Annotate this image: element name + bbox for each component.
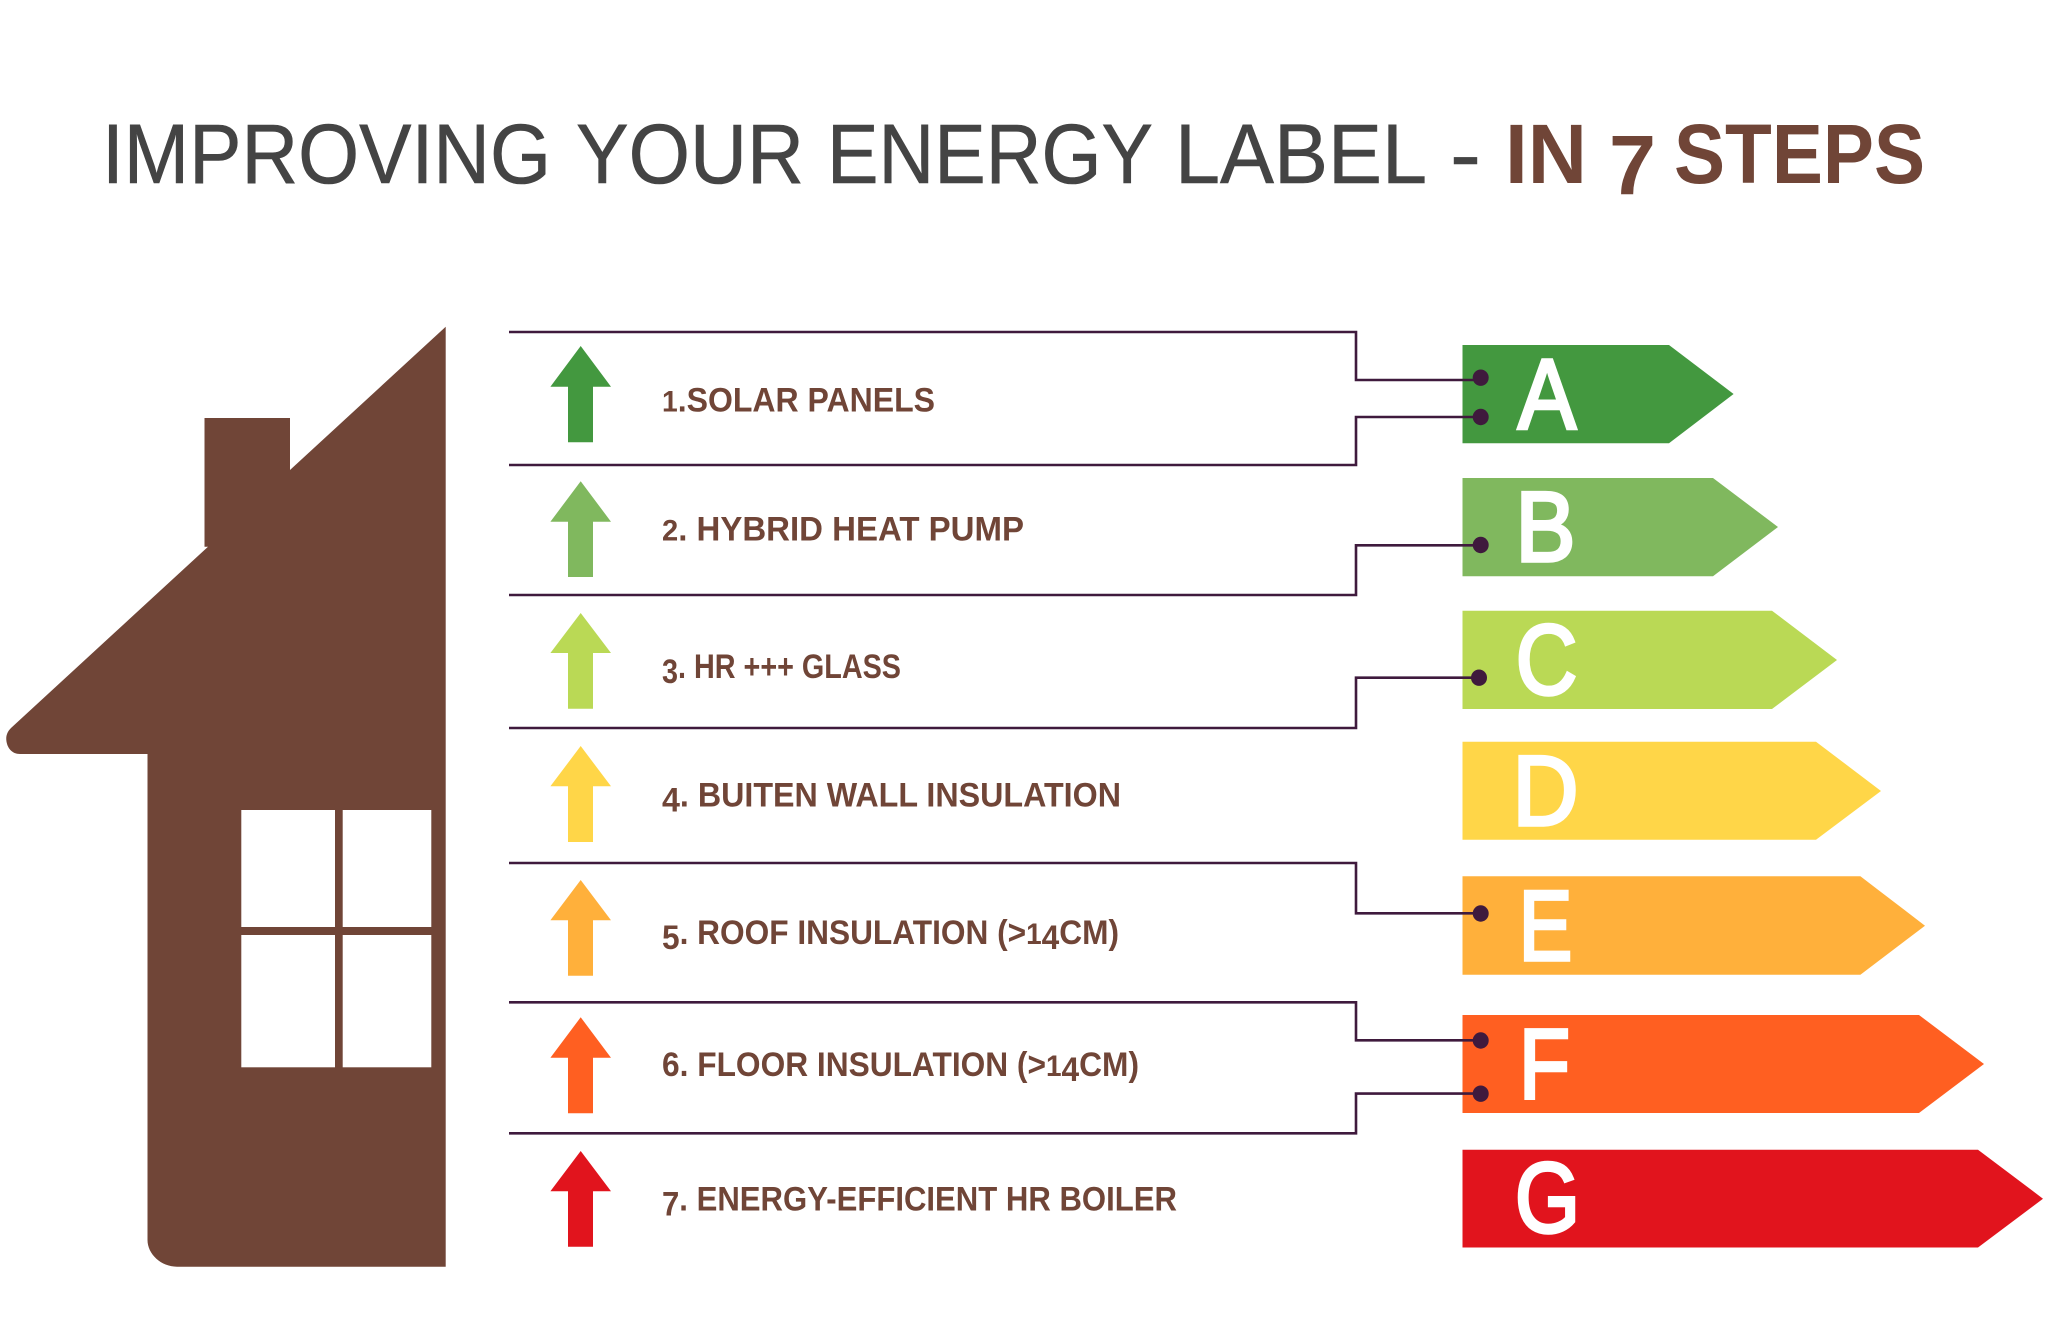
energy tag A: A bbox=[1518, 338, 1576, 450]
title: IN bbox=[1505, 107, 1587, 201]
step 5 label: 4 bbox=[1042, 919, 1059, 957]
connector: step 3 to tag B bbox=[509, 537, 1489, 595]
energy tag G bbox=[1462, 1142, 2043, 1253]
step 4 arrow bbox=[550, 746, 611, 842]
energy tag B: B bbox=[1516, 471, 1576, 582]
title bbox=[102, 107, 1925, 212]
title: YOUR bbox=[576, 107, 804, 201]
energy tag F: F bbox=[1519, 1008, 1570, 1119]
connector: step 2 to tag A bbox=[509, 409, 1489, 465]
step 7 arrow bbox=[550, 1151, 611, 1247]
connector: step 1 to tag A bbox=[509, 332, 1489, 386]
step 7 label: . ENERGY-EFFICIENT HR BOILER bbox=[679, 1181, 1177, 1219]
title: - bbox=[1450, 107, 1481, 201]
title: LABEL bbox=[1175, 107, 1427, 201]
title: IMPROVING bbox=[102, 107, 551, 201]
step 2 arrow bbox=[550, 481, 611, 577]
title: 7 bbox=[1609, 118, 1656, 212]
step 5 label: 1 bbox=[1026, 918, 1042, 951]
energy tag E bbox=[1462, 870, 1925, 981]
step 7 label: 7 bbox=[662, 1186, 679, 1224]
step 6 label: 6. FLOOR INSULATION (>1 bbox=[662, 1046, 1074, 1084]
step 5 label: CM) bbox=[1059, 914, 1119, 952]
step 4 label: 4 bbox=[662, 782, 680, 820]
step 4 label: . BUITEN WALL INSULATION bbox=[680, 777, 1121, 815]
step 1 label: 1.SOLAR PANELS bbox=[662, 382, 935, 420]
step 1 arrow bbox=[550, 346, 611, 442]
connector: step 4 to tag C bbox=[509, 670, 1487, 728]
connector: step 5 to tag E bbox=[509, 863, 1489, 922]
energy tag E: E bbox=[1519, 870, 1572, 981]
step 6 label: CM) bbox=[1079, 1046, 1139, 1084]
step 2 label: 2. HYBRID HEAT PUMP bbox=[662, 511, 1024, 549]
title: ENERGY bbox=[827, 107, 1153, 201]
house silhouette with window bbox=[6, 327, 446, 1267]
title: STEPS bbox=[1674, 107, 1925, 201]
energy tag A bbox=[1462, 338, 1734, 450]
energy tag C bbox=[1462, 604, 1837, 715]
step 5 label: . ROOF INSULATION (> bbox=[680, 914, 1026, 952]
step 3 label: 3 bbox=[662, 653, 678, 691]
step 5 arrow bbox=[550, 880, 611, 976]
energy tag G: G bbox=[1515, 1142, 1580, 1253]
step 5 label: 5 bbox=[662, 919, 680, 957]
energy tag C: C bbox=[1516, 604, 1577, 715]
energy tag D bbox=[1462, 735, 1881, 846]
step 3 label: . HR +++ GLASS bbox=[678, 648, 901, 686]
energy tag B bbox=[1462, 471, 1778, 582]
step 3 arrow bbox=[550, 613, 611, 709]
connector: step 7 to tag F bbox=[509, 1086, 1489, 1133]
step 6 arrow bbox=[550, 1017, 611, 1113]
connector: step 6 to tag F bbox=[509, 1002, 1489, 1049]
step 6 label: 4 bbox=[1062, 1051, 1079, 1089]
energy tag D: D bbox=[1512, 735, 1578, 846]
energy tag F bbox=[1462, 1008, 1984, 1119]
